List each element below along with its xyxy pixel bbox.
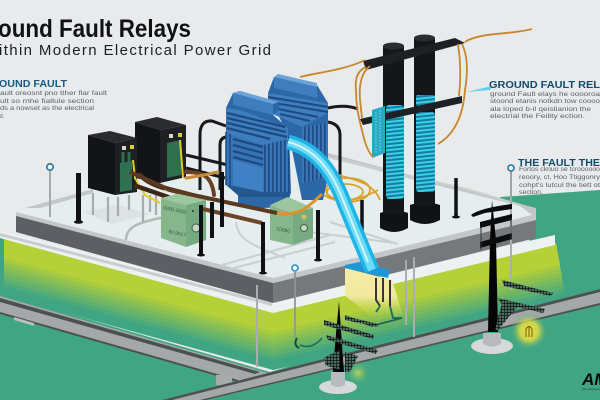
box 2 label: 10090 [276,226,291,235]
cabinet legs [93,193,156,222]
grey rim: back edges [25,153,536,218]
relay cabinet 2 [135,117,186,183]
surface conduits [126,157,520,269]
cyan relay module [372,106,385,158]
left heading: OUND FAULT [0,78,68,90]
front body left face [226,132,263,192]
left body text: d. [0,113,4,120]
left body text: ault oreosnt pno tther flar fault [0,90,107,97]
right body text: stoond etanis notkdn tow coooo [490,98,600,105]
orange and brown cable bundle [136,172,218,200]
text block: fault theory right [518,157,600,196]
left body text [0,90,107,120]
steel posts and rails [130,172,460,274]
small lattice arms [324,320,374,339]
text block: ground fault left [0,78,107,120]
right heading: GROUND FAULT REL [489,79,600,91]
theory body text: section. [519,190,543,196]
text block: ground fault relay right [489,79,600,120]
small ground sensor [526,326,532,337]
cooling fins [226,108,288,145]
fault notch [345,262,403,320]
theory heading: THE FAULT THE [518,157,600,169]
right body text: electrial the Feility ection. [490,113,585,120]
yellow ground glow spots [345,312,548,386]
small pole footing [319,380,357,394]
slab under cabinets [83,205,150,224]
orange wires over columns [300,29,532,157]
grey side: right [273,220,536,303]
transmission pole small [300,301,378,394]
box 1 label: 0000 0000 [163,205,187,216]
fault current arrow [288,142,372,270]
grey side: left [16,212,273,283]
box 1 lower label: 90 9917 [168,229,187,239]
right lower marker pin [292,265,299,348]
rail: left segment [0,296,268,381]
title: ound Fault Relays [0,15,191,43]
platform top surface [16,155,536,283]
rail: right segment [162,289,600,400]
rear silhouette [268,77,328,200]
right body text: ala loped b-il qeistianion the [490,106,591,113]
white ledge [0,231,555,313]
front silhouette [226,91,291,204]
theory body text: cohpt's lutcul the tiett ot [519,183,600,189]
grounding columns [360,34,465,232]
green junction box 2 [270,197,313,245]
rail support [216,375,232,385]
small rail plate [14,317,34,326]
right body text: ground Fault elays he ooooroa [490,91,600,98]
cabinet 1 circuit panel [120,161,132,192]
cyan coil right lower [416,112,435,192]
glow link to label [466,86,492,92]
transformer front [226,91,291,208]
black post [74,173,83,224]
green wall: right face [273,243,566,370]
left marker pin [47,164,53,217]
pole crossarms [471,204,512,217]
leads down from fault [345,278,402,326]
green wall: left face [4,236,273,370]
thin grey poles [257,172,511,367]
theory body text: Fortos cknuo se tcroooooo [519,167,600,173]
lower crossbar [360,96,462,125]
right body text [490,91,600,120]
top crossbar [363,38,465,70]
top right marker pin [508,165,514,198]
green junction box 1 [161,193,206,247]
cyan coil right upper [416,95,435,106]
wire loops by conduit [324,172,380,202]
pole footing [471,338,513,354]
left body text: ds a nowset as the electrical [0,105,95,112]
relay cabinet 1 [88,131,160,203]
cabinet 2 circuit panel [167,140,181,178]
small pole shaft [333,301,344,372]
ground [0,190,600,400]
transformer rear [268,74,328,200]
transmission pole large [471,200,553,354]
pole shaft [488,200,498,332]
subtitle: ithin Modern Electrical Power Grid [0,42,271,59]
transformer base [238,192,288,208]
column bases [380,210,408,232]
rails [0,289,600,400]
top slab [233,93,273,115]
theory body text [519,167,600,196]
black pipes [186,106,358,190]
cyan coil left [386,105,404,199]
front body ribbed face [263,137,291,192]
substation platform [0,153,566,370]
theory body text: reoory, ct, Hoo Ttiggonry [519,175,600,181]
left body text: ult so rnhe fiallule section [0,98,94,105]
lattice arms [502,280,553,296]
column shafts [383,46,404,214]
